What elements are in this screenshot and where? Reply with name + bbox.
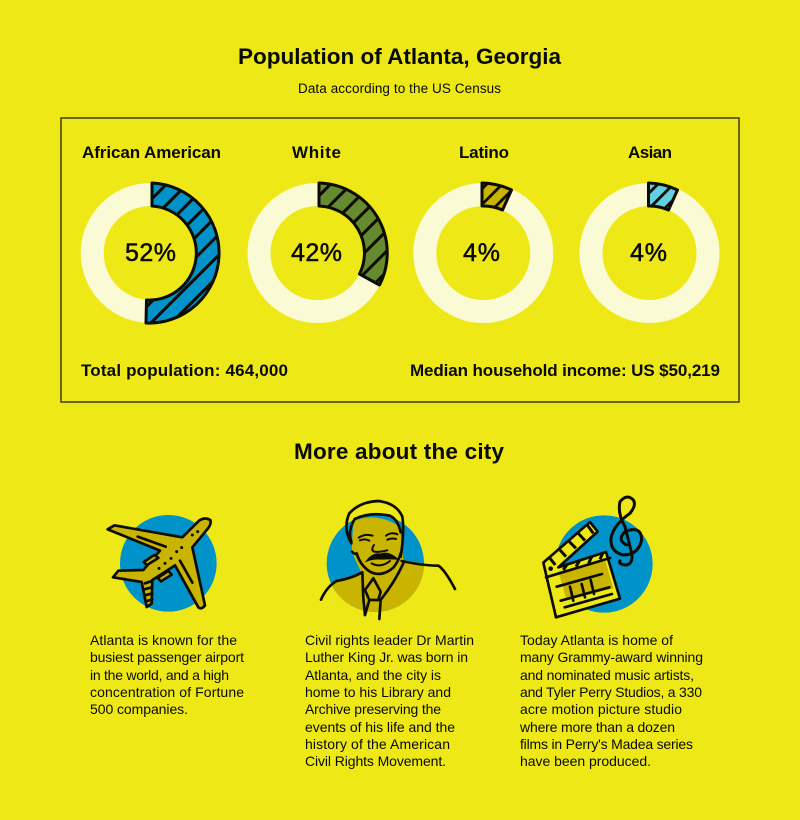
donut: White: White: [292, 143, 341, 162]
title: Population of Atlanta, Georgia: [238, 44, 561, 69]
text: airport: busiest passenger airport: [90, 649, 244, 665]
donut: Asian: [591, 143, 708, 312]
text: civil rights: Luther King Jr. was born in: [305, 649, 468, 665]
panel: population chart: [61, 118, 739, 402]
donut: White: 42%: [291, 239, 342, 267]
text: entertainment: Today Atlanta is home of: [520, 632, 673, 648]
text: airport: in the world, and a high: [90, 667, 229, 683]
text: entertainment: films in Perry's Madea series: [520, 736, 693, 752]
icon: Martin Luther King Jr. portrait: [320, 500, 456, 620]
total population: Total population: 464,000: [81, 361, 288, 380]
donut: White: [259, 143, 387, 312]
text: entertainment: where more than a dozen: [519, 719, 675, 735]
text: civil rights: Civil Rights Movement.: [305, 753, 446, 769]
text: civil rights: home to his Library and: [305, 684, 451, 700]
text: entertainment: have been produced.: [520, 753, 651, 769]
icon: airplane: [108, 515, 217, 612]
text: airport: Atlanta is known for the: [90, 632, 237, 648]
subtitle: Data according to the US Census: [298, 81, 501, 96]
donut: Latino: 4%: [463, 239, 500, 267]
text: entertainment: and Tyler Perry Studios, a 330: [520, 684, 702, 700]
text: airport: 500 companies.: [90, 701, 188, 717]
text: entertainment: many Grammy-award winning: [520, 649, 703, 665]
text: entertainment: and nominated music artists,: [520, 667, 694, 683]
donut: African American: [82, 143, 221, 323]
donut: Asian: Asian: [628, 143, 672, 162]
donut: African American: African American: [82, 143, 221, 162]
median household income: Median household income: US $50,219: [410, 361, 720, 380]
text: airport: [90, 632, 244, 717]
text: entertainment: acre motion picture studio: [520, 701, 682, 717]
text: civil rights: Archive preserving the: [305, 701, 441, 717]
text: civil rights: Atlanta, and the city is: [305, 667, 441, 683]
donut: African American: 52%: [125, 239, 176, 267]
donut: Latino: [425, 143, 542, 312]
heading: more about the city: More about the city: [294, 439, 504, 464]
text: civil rights: history of the American: [305, 736, 450, 752]
text: civil rights: events of his life and the: [305, 719, 455, 735]
donut: Latino: Latino: [459, 143, 509, 162]
text: civil rights: Civil rights leader Dr Martin: [305, 632, 474, 648]
text: civil rights: [305, 632, 474, 769]
icon: clapperboard and treble clef: [543, 497, 653, 617]
icon: airplane window dots: [157, 530, 199, 570]
text: entertainment: [519, 632, 703, 769]
donut: Asian: 4%: [630, 239, 667, 267]
text: airport: concentration of Fortune: [90, 684, 244, 700]
